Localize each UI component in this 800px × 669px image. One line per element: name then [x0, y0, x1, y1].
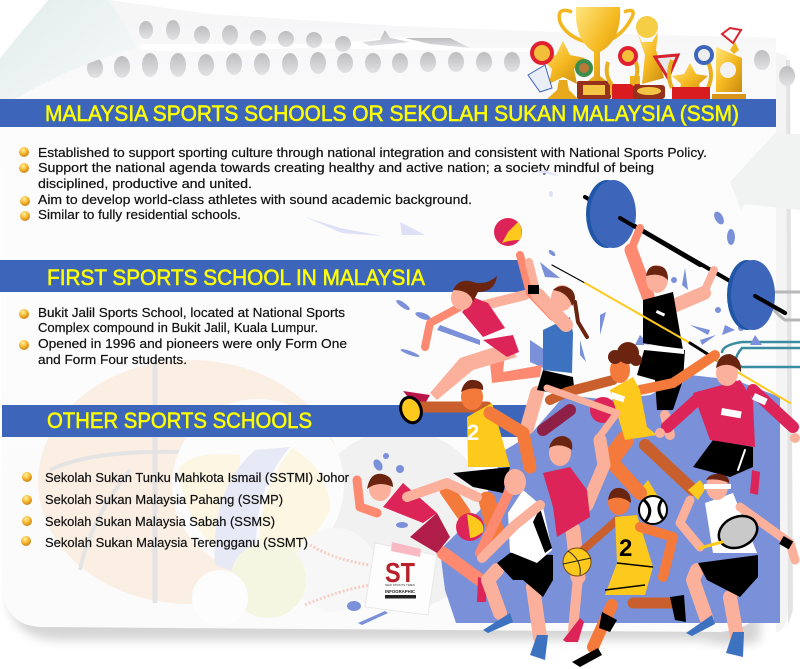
blue paint backdrop: [440, 375, 780, 623]
basketball player figure: 2: [619, 535, 632, 562]
decorative tape and paper clips: [722, 134, 800, 367]
running red player figure: [357, 474, 487, 602]
javelin: [552, 265, 790, 403]
discus thrower figure: 2: [467, 420, 479, 445]
bullet list: other schools: Sekolah Sukan Tunku Mahkota Ismail (SSTMI) Johor: [45, 471, 349, 485]
bullet list: other schools: [21, 471, 349, 550]
cheerleader figure: [543, 388, 617, 642]
javelin thrower figure: [550, 342, 715, 505]
banner: main heading: MALAYSIA SPORTS SCHOOLS OR SEKOLAH SUKAN MALAYSIA (SSM): [45, 101, 739, 126]
bullet list: other schools: Sekolah Sukan Malaysia Pahang (SSMP): [45, 493, 283, 507]
bullet list: first school: Opened in 1996 and pioneers were only Form One: [38, 337, 347, 351]
bullet list: other schools: Sekolah Sukan Malaysia Sabah (SSMS): [45, 515, 275, 529]
faint sports balls: [38, 360, 490, 626]
bullet list: first school: and Form Four students.: [38, 353, 187, 367]
basketball player figure: [563, 488, 686, 667]
hurdler figure: [403, 276, 542, 402]
bullet list: about SSM: Similar to fully residential schools.: [38, 208, 241, 222]
bullet list: about SSM: Aim to develop world-class athletes with sound academic background.: [38, 193, 472, 207]
pale paint splashes: [305, 170, 560, 236]
tennis player figure: [680, 474, 795, 657]
bullet list: about SSM: disciplined, productive and united.: [38, 177, 252, 191]
bullet list: first school: [19, 306, 347, 367]
red ball: [590, 397, 616, 423]
bullet list: about SSM: Established to support sporting culture through national integration and consistent with National Sports Policy.: [38, 146, 707, 160]
bullet list: other schools: Sekolah Sukan Malaysia Terengganu (SSMT): [45, 536, 308, 550]
volleyball: [494, 218, 522, 246]
black and white ball: [639, 496, 667, 524]
weightlifter figure: [585, 180, 785, 435]
paint splashes: [347, 210, 762, 625]
bullet list: first school: Complex compound in Bukit Jalil, Kuala Lumpur.: [38, 321, 318, 335]
ST infographic sticker: INFOGRAPHIC: [385, 589, 416, 594]
banner: other sports schools: [2, 405, 532, 437]
ST infographic sticker: [365, 542, 437, 615]
bullet list: first school: Bukit Jalil Sports School, located at National Sports: [38, 306, 345, 320]
bullet list: about SSM: Support the national agenda towards creating healthy and active nation; a society mindful of being: [38, 161, 654, 175]
bullet list: about SSM: [19, 146, 707, 222]
spiral holes in the torn paper: [87, 20, 795, 86]
banner: other sports schools: OTHER SPORTS SCHOOLS: [47, 408, 312, 433]
red goalkeeper figure: [655, 354, 800, 495]
blue vest volleyball player: [520, 255, 587, 428]
bald volleyball player figure: [480, 469, 553, 660]
banner: first sports school: [0, 260, 525, 292]
curled paper corner: [0, 0, 136, 108]
trophies and medals: [528, 7, 746, 99]
ST infographic sticker: NEW STRAITS TIMES: [385, 583, 415, 587]
discus thrower figure: [397, 380, 530, 537]
ST infographic sticker: ST: [385, 557, 415, 588]
banner: first sports school: FIRST SPORTS SCHOOL IN MALAYSIA: [47, 265, 425, 290]
